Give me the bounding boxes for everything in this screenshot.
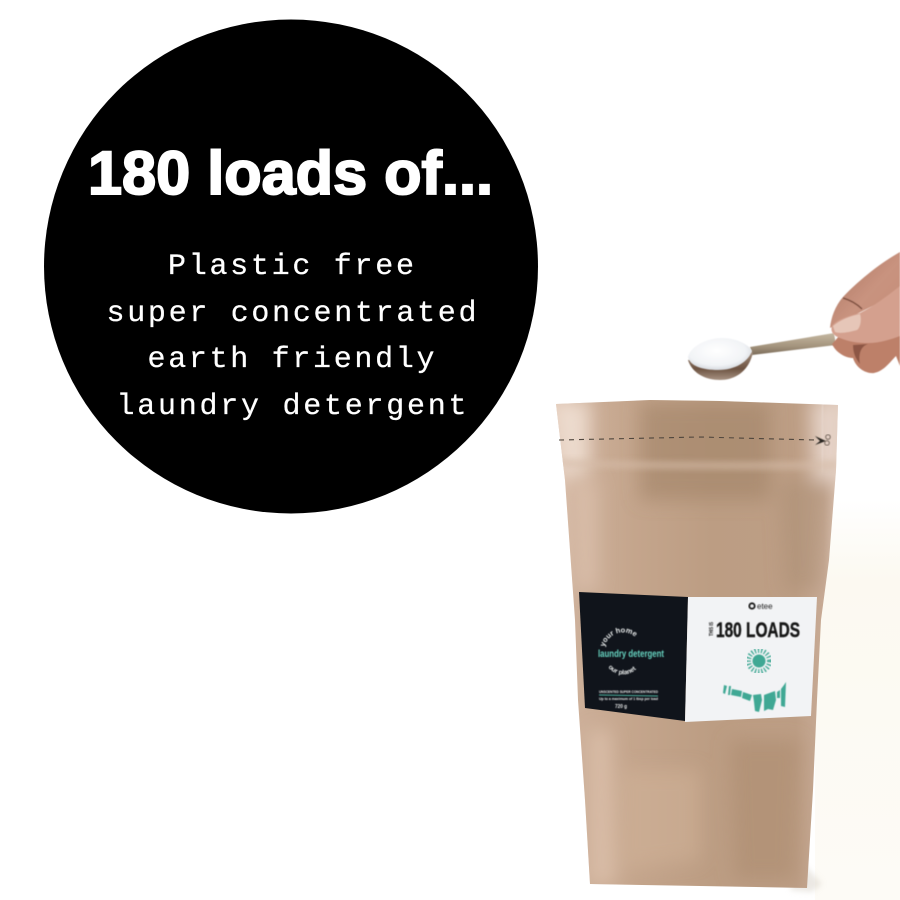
round logo text: our planet — [608, 665, 637, 676]
pouch body — [556, 400, 838, 888]
thumb — [831, 286, 900, 343]
icon: sun — [748, 650, 770, 672]
tear line — [559, 437, 815, 440]
thumbnail — [833, 314, 861, 333]
side seam — [822, 404, 823, 470]
spoon handle — [750, 333, 836, 355]
cream backdrop right of the bag — [815, 500, 900, 900]
small print — [599, 689, 658, 710]
pouch shadow — [790, 860, 822, 892]
knuckle crease — [843, 298, 862, 309]
measuring spoon with powder — [688, 333, 836, 380]
icon: scissors — [815, 435, 830, 445]
description text: earth friendly — [148, 343, 434, 377]
label headline: 180 LOADS — [716, 619, 800, 642]
brand logo: etee — [757, 602, 773, 611]
product name: laundry detergent — [598, 648, 664, 660]
kraft pouch — [556, 400, 838, 893]
pouch folds and highlights — [550, 400, 840, 885]
small print: Up to a maximum of 1 tbsp per load — [599, 696, 658, 701]
label: white panel — [685, 597, 817, 722]
icon: clothesline — [723, 682, 786, 712]
product label — [579, 592, 817, 722]
label headline — [709, 619, 800, 642]
description text — [106, 250, 476, 424]
description text: Plastic free — [168, 250, 414, 284]
description text: laundry detergent — [116, 390, 466, 424]
black circle with headline and description — [44, 20, 538, 514]
hand holding spoon — [830, 252, 900, 373]
label: dark panel — [579, 592, 688, 721]
lower fingers — [832, 330, 900, 373]
back of hand — [830, 252, 900, 328]
heading: 180 loads of... — [88, 139, 493, 207]
finger shadow — [853, 344, 868, 364]
top seal band — [556, 458, 838, 470]
powder — [688, 338, 752, 370]
small print: 720 g — [615, 704, 627, 710]
spoon bowl — [688, 352, 753, 380]
description text: super concentrated — [106, 297, 476, 331]
label headline: THIS IS — [709, 621, 715, 636]
round logo text — [600, 627, 638, 676]
round logo text: your home — [600, 627, 638, 648]
small print: UNSCENTED SUPER CONCENTRATED — [599, 689, 658, 694]
